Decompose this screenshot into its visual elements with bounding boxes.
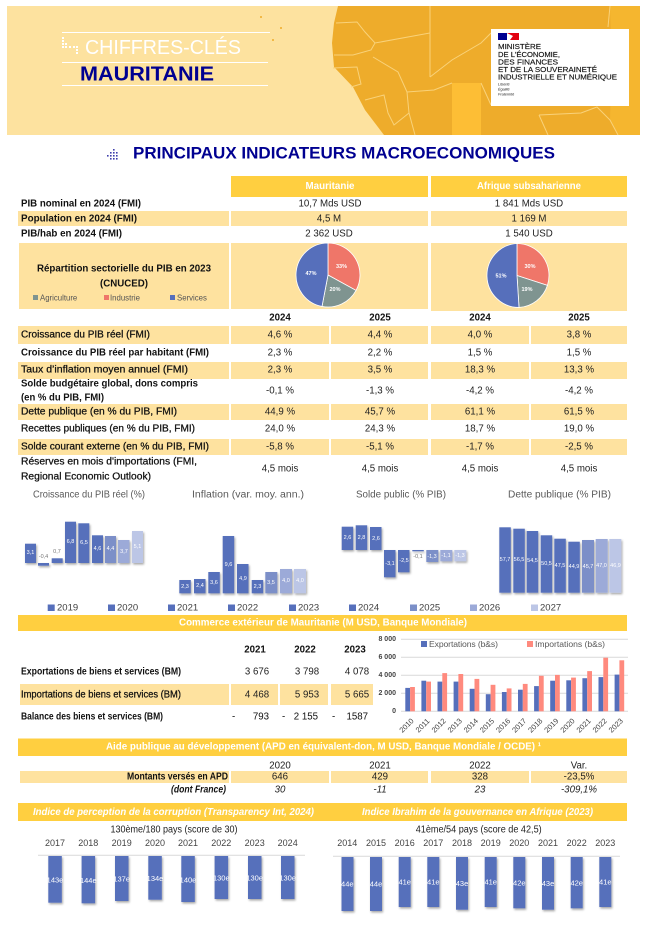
header banner [7,6,640,135]
bar chart: corruption perception rank: 2019 [112,838,132,848]
bar chart: public debt: 47,5 [555,563,565,569]
bar chart: real GDP growth: 5,1 [134,544,141,550]
table: official development aid: 23 [474,784,486,796]
table: official development aid: 646 [272,772,288,782]
bar chart: Ibrahim governance rank: 2022 [567,838,587,848]
bar chart: Ibrahim governance rank: 43e [542,879,554,888]
bar chart: public balance: -1,3 [427,554,437,560]
table: macroeconomic indicators: 2,2 % [368,348,393,358]
bar chart: Ibrahim governance rank: 41e [427,878,440,886]
table: macroeconomic indicators: 4,5 mois [262,464,298,474]
bar chart: inflation: 2,4 [196,583,204,589]
heading: official development aid: Aide publique au développement (APD en équivalent-don, M USD, Banque Mondiale / OCDE) ¹ [106,742,542,752]
table: official development aid [20,760,627,796]
bar chart: public balance: -1,3 [455,553,465,559]
bar chart: public debt: 44,9 [569,564,579,570]
table: official development aid: -11 [373,784,387,796]
bar chart: real GDP growth: Croissance du PIB réel (%) [33,490,145,500]
table: macroeconomic indicators: 45,7 % [365,406,395,418]
bar chart: Ibrahim governance rank: 2016 [395,838,415,848]
bar chart: inflation: 4,9 [239,576,247,582]
bar chart: corruption perception rank: 2020 [145,838,165,848]
shared legend for small charts: 2025 [419,602,440,614]
bar chart: inflation: Inflation (var. moy. ann.) [192,490,304,500]
bar chart: real GDP growth [25,490,145,566]
heading: foreign trade [18,615,627,631]
table: official development aid: 2020 [269,760,291,772]
bar chart: Ibrahim governance rank: 2017 [423,838,443,848]
table: macroeconomic indicators: Croissance du PIB réel par habitant (FMI) [21,348,209,358]
bar chart: exports and imports: 2021 [575,716,593,735]
bar chart: public debt: 46,9 [610,563,621,569]
bar chart: Ibrahim governance rank: 42e [570,878,583,888]
table: foreign trade: 3 676 [245,666,269,678]
bar chart: corruption perception rank: 2017 [45,838,65,848]
table: macroeconomic indicators: 4,5 mois [561,464,597,474]
table: foreign trade: Importations de biens et services (BM) [21,690,181,700]
bar chart: exports and imports: 2011 [414,717,431,734]
table: foreign trade: - [232,712,235,722]
panel: sectoral GDP breakdown [19,243,627,311]
bar chart: corruption perception rank: 130e [246,874,263,882]
table: foreign trade: 2022 [294,644,316,656]
bar chart: inflation [179,490,306,593]
ministry logo: Liberté [498,82,510,86]
table: general indicators: 1 169 M [511,214,547,224]
table: macroeconomic indicators: 2024 [269,312,291,324]
bar chart: public balance: Solde public (% PIB) [356,490,446,500]
table: general indicators: 4,5 M [317,214,341,224]
pie legend: Services [177,294,207,302]
bar chart: public debt: 47,0 [596,563,607,569]
pie chart: Afrique subsaharienne: 30% [524,264,536,270]
bar chart: Ibrahim governance rank: 41ème/54 pays (score de 42,5) [416,824,542,836]
table: foreign trade: Exportations de biens et services (BM) [21,666,181,678]
table: official development aid: 2021 [369,760,391,772]
bar chart: exports and imports: 2 000 [378,690,396,697]
country name: MAURITANIE [80,64,214,86]
bar chart: public balance: -0,1 [413,554,423,560]
shared legend for small charts: 2019 [57,602,78,614]
section title: PRINCIPAUX INDICATEURS MACROECONOMIQUES [133,144,555,162]
bar chart: corruption perception rank: 130e [213,874,230,882]
table: macroeconomic indicators: 4,0 % [468,330,493,340]
table: official development aid: 328 [472,772,488,782]
bar chart: exports and imports: 2018 [526,716,544,735]
bar chart: exports and imports: 2017 [510,716,528,735]
pie chart: Mauritanie: 33% [336,264,347,270]
table: official development aid: Var. [571,760,587,772]
bar chart: exports and imports: 2020 [558,716,577,735]
table: macroeconomic indicators: -2,5 % [565,442,593,452]
pie legend: Agriculture [40,294,77,302]
bar chart: real GDP growth: -0,4 [39,554,48,560]
bar chart: exports and imports: 8 000 [378,636,396,643]
bar chart: public debt: 45,7 [583,564,593,570]
bar chart: corruption perception rank: 140e [180,876,196,884]
ministry logo [491,29,629,106]
bar chart: public balance [342,490,466,577]
bar chart: corruption perception rank [38,824,305,903]
table: macroeconomic indicators: Réserves en mois d'importations (FMI, [21,456,197,468]
pie chart: Mauritanie: 20% [329,287,341,293]
bar chart: real GDP growth: 4,4 [107,546,114,552]
table: official development aid: Montants versés en APD [127,772,228,782]
table: macroeconomic indicators: 4,4 % [368,330,393,340]
table: macroeconomic indicators: 44,9 % [265,406,295,418]
heading band: governance indices [18,803,627,821]
table: general indicators: 2 362 USD [305,228,353,240]
bar chart: Ibrahim governance rank: 41e [398,878,411,886]
table: macroeconomic indicators: -5,1 % [366,442,394,452]
banner title: chiffres-clés: CHIFFRES-CLÉS [85,36,241,59]
table: macroeconomic indicators: 61,1 % [465,406,495,418]
table: macroeconomic indicators: 13,3 % [564,364,594,376]
table: macroeconomic indicators: 18,7 % [465,424,495,434]
bar chart: real GDP growth: 0,7 [53,549,61,555]
table: foreign trade: 5 953 [295,690,319,700]
table: macroeconomic indicators [18,312,627,482]
table: macroeconomic indicators: Dette publique (en % du PIB, FMI) [21,406,177,418]
table: macroeconomic indicators: (en % du PIB, FMI) [21,392,104,404]
bar chart: public debt: Dette publique (% PIB) [508,490,611,500]
bar chart: corruption perception rank: 2022 [211,838,231,848]
bar chart: public debt [499,490,621,593]
table: macroeconomic indicators: 2,3 % [268,364,293,376]
bar chart: Ibrahim governance rank: 2015 [366,838,386,848]
bar chart: exports and imports: 2022 [591,716,609,735]
bar chart: exports and imports: 6 000 [378,654,396,661]
bar chart: corruption perception rank: 144e [80,876,97,885]
table: general indicators: PIB/hab en 2024 (FMI) [21,228,122,240]
table: macroeconomic indicators: 1,5 % [567,348,592,358]
trade chart legend: Exportations (b&s) [429,639,498,649]
heading: foreign trade: Commerce extérieur de Mauritanie (M USD, Banque Mondiale) [179,618,467,628]
pie chart: Afrique subsaharienne: 51% [495,274,507,280]
bar chart: Ibrahim governance rank: 2014 [337,838,357,848]
table: macroeconomic indicators: 2024 [469,312,491,324]
bar chart: public balance: 2,8 [358,535,365,541]
table: macroeconomic indicators: 19,0 % [564,424,594,434]
bar chart: real GDP growth: 3,7 [120,549,128,555]
bar chart: corruption perception rank: 143e [47,876,63,884]
table: macroeconomic indicators: 4,5 mois [462,464,498,474]
table: foreign trade: Balance des biens et services (BM) [21,712,163,722]
bar chart: exports and imports: 0 [392,708,396,715]
pie chart: Mauritanie: 47% [305,271,317,277]
bar chart: Ibrahim governance rank: 41e [484,878,497,886]
table: macroeconomic indicators: 2025 [568,312,590,324]
panel: sectoral GDP breakdown: Répartition sectorielle du PIB en 2023 [37,264,212,274]
pie legend [33,294,207,302]
trade chart legend [421,639,605,649]
bar chart: corruption perception rank: 2023 [245,838,265,848]
table: macroeconomic indicators: -4,2 % [466,386,494,396]
shared legend for small charts: 2026 [479,602,500,614]
table: foreign trade: - [282,712,285,722]
bar chart: corruption perception rank: 2021 [178,838,198,848]
table: macroeconomic indicators: 3,8 % [567,330,592,340]
table: general indicators: 10,7 Mds USD [298,198,362,210]
table: foreign trade: 3 798 [295,666,319,678]
bar chart: Ibrahim governance rank [333,824,620,911]
bar chart: Ibrahim governance rank: 44e [341,880,354,888]
table: macroeconomic indicators: Solde courant externe (en % du PIB, FMI) [21,442,209,452]
bar chart: Ibrahim governance rank: 41e [599,878,612,886]
table: macroeconomic indicators: Regional Economic Outlook) [21,472,151,482]
bar chart: exports and imports: 2012 [430,716,448,735]
bar chart: exports and imports: 2019 [542,716,560,735]
table: macroeconomic indicators: 2025 [369,312,391,324]
table: foreign trade: 4 078 [345,666,369,678]
bar chart: Ibrahim governance rank: 2021 [538,838,558,848]
bar chart: inflation: 2,3 [254,584,261,590]
table: general indicators: Afrique subsaharienne [477,181,581,192]
shared legend for small charts [48,602,561,614]
table: official development aid: -23,5% [564,772,595,782]
bar chart: exports and imports: 2014 [462,716,480,735]
bar chart: Ibrahim governance rank: 42e [513,878,526,888]
table: foreign trade: 2021 [244,644,266,656]
bar chart: Ibrahim governance rank: 2018 [452,838,472,848]
table: macroeconomic indicators: -1,3 % [366,386,394,396]
table: macroeconomic indicators: 4,6 % [268,330,293,340]
heading band: governance indices: Indice de perception de la corruption (Transparency Int, 2024) [33,806,314,818]
bar chart: corruption perception rank: 130ème/180 pays (score de 30) [110,824,238,836]
table: general indicators: PIB nominal en 2024 (FMI) [21,198,141,210]
bar chart: public balance: -1,1 [441,553,451,559]
pie chart: Mauritanie [296,243,360,307]
bar chart: public debt: 56,5 [514,557,524,563]
bar chart: public balance: 2,6 [372,536,380,542]
bar chart: inflation: 4,0 [282,578,290,584]
bar chart: Ibrahim governance rank: 43e [456,879,468,888]
bar chart: Ibrahim governance rank: 2020 [509,838,529,848]
bar chart: public debt: 54,5 [527,558,538,564]
ministry logo: INDUSTRIELLE ET NUMÉRIQUE [498,73,617,82]
ministry logo: MINISTÈRE [498,42,541,51]
table: official development aid: 2022 [469,760,491,772]
bar chart: exports and imports: 2023 [607,716,625,735]
table: official development aid: -309,1% [561,784,597,796]
table: macroeconomic indicators: 2,3 % [268,348,293,358]
bar chart: real GDP growth: 3,1 [27,550,34,556]
ministry logo: ET DE LA SOUVERAINETÉ [498,65,597,74]
ministry logo: DES FINANCES [498,57,558,66]
ministry logo: Égalité [498,86,510,92]
table: macroeconomic indicators: -4,2 % [565,386,593,396]
table: macroeconomic indicators: -5,8 % [266,442,294,452]
table: macroeconomic indicators: 61,5 % [564,406,594,418]
table: general indicators: 1 540 USD [505,228,553,240]
bar chart: inflation: 3,6 [210,580,218,586]
table: macroeconomic indicators: Recettes publiques (en % du PIB, FMI) [21,424,195,434]
bar chart: inflation: 3,5 [267,580,275,586]
shared legend for small charts: 2024 [358,602,379,614]
table: official development aid: (dont France) [171,784,226,796]
table: general indicators: Population en 2024 (FMI) [21,214,137,224]
bar chart: real GDP growth: 6,8 [67,539,74,545]
ministry logo: Fraternité [498,92,514,96]
table: macroeconomic indicators: 1,5 % [468,348,493,358]
heading band: governance indices: Indice Ibrahim de la gouvernance en Afrique (2023) [362,806,593,818]
bar chart: exports and imports: 2015 [478,716,496,735]
bar chart: corruption perception rank: 134e [147,874,163,883]
shared legend for small charts: 2020 [117,602,138,614]
table: foreign trade: 793 [253,712,269,722]
table: general indicators: 1 841 Mds USD [495,198,563,210]
table: general indicators [18,176,627,240]
table: macroeconomic indicators: 24,0 % [265,424,295,434]
bar chart: public balance: -2,5 [399,558,409,564]
bar chart: inflation: 4,0 [296,578,304,584]
banner title: chiffres-clés [62,32,270,86]
bar chart: public balance: 2,6 [344,535,351,541]
bar chart: Ibrahim governance rank: 44e [370,880,382,888]
table: general indicators: Mauritanie [306,181,355,192]
table: macroeconomic indicators: Croissance du PIB réel (FMI) [21,330,150,340]
table: macroeconomic indicators: -1,7 % [466,442,494,452]
trade chart legend: Importations (b&s) [535,639,605,649]
ministry logo: DE L'ÉCONOMIE, [498,50,560,59]
table: macroeconomic indicators: 4,5 mois [362,464,398,474]
bar chart: corruption perception rank: 130e [279,874,296,882]
table: macroeconomic indicators: 18,3 % [465,364,495,376]
table: foreign trade: - [332,712,335,722]
pie legend: Industrie [110,294,140,302]
bar chart: corruption perception rank: 2018 [78,838,98,848]
bar chart: corruption perception rank: 2024 [278,838,298,848]
bar chart: exports and imports: 4 000 [378,672,396,679]
bar chart: corruption perception rank: 137e [113,874,130,884]
heading: official development aid [18,738,627,756]
table: foreign trade: 4 468 [245,690,269,700]
panel: sectoral GDP breakdown: (CNUCED) [100,278,148,290]
table: foreign trade: 2 155 [294,712,318,722]
shared legend for small charts: 2023 [298,602,319,614]
bar chart: exports and imports: 2010 [397,716,416,735]
bar chart: exports and imports: 2016 [494,716,512,735]
table: macroeconomic indicators: Taux d’inflation moyen annuel (FMI) [21,364,188,376]
bar chart: public debt: 50,5 [541,561,552,567]
pie chart: Afrique subsaharienne [487,244,549,307]
table: official development aid: 30 [275,784,286,796]
bar chart: exports and imports [378,636,628,735]
bar chart: Ibrahim governance rank: 2023 [595,838,615,848]
bar chart: real GDP growth: 4,6 [94,546,101,552]
table: foreign trade [20,644,373,722]
bar chart: inflation: 2,3 [181,584,189,590]
bar chart: inflation: 9,6 [225,562,232,568]
table: foreign trade: 2023 [344,644,366,656]
table: macroeconomic indicators: 3,5 % [368,364,393,376]
table: foreign trade: 5 665 [345,690,369,700]
table: macroeconomic indicators: 24,3 % [365,424,395,434]
shared legend for small charts: 2021 [177,602,198,614]
bar chart: exports and imports: 2013 [446,716,464,735]
shared legend for small charts: 2022 [237,602,258,614]
table: macroeconomic indicators: -0,1 % [266,386,294,396]
bar chart: real GDP growth: 6,5 [80,540,88,546]
bar chart: Ibrahim governance rank: 2019 [481,838,501,848]
bar chart: public debt: 57,7 [500,557,510,563]
table: macroeconomic indicators: Solde budgétaire global, dons compris [21,378,198,390]
pie chart: Afrique subsaharienne: 19% [521,287,533,293]
shared legend for small charts: 2027 [540,602,561,614]
table: foreign trade: 1587 [346,712,368,722]
bar chart: public balance: -3,1 [385,561,395,567]
table: official development aid: 429 [372,772,388,782]
